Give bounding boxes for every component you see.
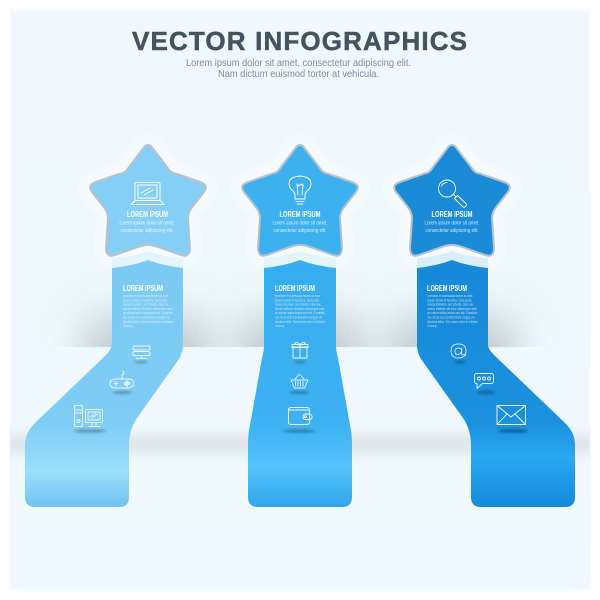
star 2 text [272, 220, 328, 234]
star 1 heading: LOREM IPSUM [127, 209, 168, 219]
ribbon 1 text [123, 283, 174, 328]
ribbon 1 text: faucibus tellus. Sed cursus tortor in ultricies [123, 320, 173, 324]
icon: desktop computer [74, 406, 106, 433]
icon: basket [289, 374, 309, 394]
ribbon 2 text: LOREM IPSUM [275, 283, 315, 293]
ribbon 2 text: dictum eleifend, elit dolor ullamcorper ante, [275, 307, 325, 311]
ribbon 2 text: faucibus tellus. Sed cursus tortor in ultricies [275, 320, 325, 324]
column 2: medium blue [242, 145, 358, 507]
ribbon 3 text: dictum eleifend, elit dolor ullamcorper ante, [428, 307, 478, 311]
star 1 text [120, 220, 174, 234]
subtitle [186, 58, 411, 80]
star 3 text: consectetur adipiscing elit. [426, 228, 478, 234]
ribbon 1 text: LOREM IPSUM [123, 283, 163, 293]
ribbon 2 text: rhoncus. [275, 324, 285, 328]
star 2 text: consectetur adipiscing elit. [274, 228, 326, 234]
chevron under star [417, 251, 488, 268]
icon: wallet [283, 408, 315, 433]
subtitle: Lorem ipsum dolor sit amet, consectetur adipiscing elit. [186, 58, 411, 69]
ribbon 3 text: LOREM IPSUM [427, 283, 467, 293]
star 2 heading: LOREM IPSUM [280, 209, 321, 219]
ribbon 1 text: dictum eleifend, elit dolor ullamcorper ante, [123, 307, 173, 311]
ribbon 3 text: faucibus tellus. Sed cursus tortor in ultricies [428, 320, 478, 324]
icon: server [133, 346, 150, 363]
ribbon 2 text: nec mi ac eros condimentum congue vel [275, 316, 322, 320]
ribbon 1 text: rhoncus. [123, 324, 133, 328]
ribbon 3 text: massa interdum, sed lobortis, risus nec [428, 303, 474, 307]
ribbon 2 text: massa interdum, sed lobortis, risus nec [275, 303, 321, 307]
icon: gift [292, 342, 308, 363]
ribbon 2 [248, 260, 352, 507]
ribbon 3 text [427, 283, 478, 328]
star 3 text [424, 220, 480, 234]
ribbon 3 text: Interdum et malesuada fames ac ante [428, 294, 472, 298]
subtitle: Nam dictum euismod tortor at vehicula. [218, 69, 379, 80]
column 3: dark blue [394, 145, 575, 507]
star 2 text: Lorem ipsum dolor sit amet, [272, 220, 328, 226]
floor shadow band [0, 438, 600, 450]
icon: at sign [451, 344, 466, 363]
icon: game controller [110, 371, 134, 394]
ribbon 1 text: ac rutrum tellus lectus sed elit. Curabitur [123, 311, 174, 315]
icon: laptop [131, 182, 164, 204]
ribbon 3 text: ac rutrum tellus lectus sed elit. Curabitur [428, 311, 478, 315]
star 3 with halo [394, 145, 510, 268]
ribbon 2 text: Interdum et malesuada fames ac ante [275, 294, 320, 298]
title: VECTOR INFOGRAPHICS [132, 26, 467, 56]
ribbon 3 text: rhoncus. [428, 324, 438, 328]
wall shadows [67, 301, 533, 347]
ribbon 1 text: massa interdum, sed lobortis, risus nec [123, 303, 169, 307]
ribbon 3 [417, 260, 575, 507]
star 3 text: Lorem ipsum dolor sit amet, [424, 220, 480, 226]
icon: speech bubble [474, 374, 495, 394]
column 1: light blue [25, 145, 206, 507]
icon: light bulb [289, 176, 311, 204]
ribbon 1 [25, 260, 183, 507]
star 2 with halo [242, 145, 358, 268]
ribbon 1 text: ipsum primis in faucibus. Sed porta [123, 298, 167, 302]
star 1 text: Lorem ipsum dolor sit amet, [120, 220, 174, 226]
ribbon 2 text [275, 283, 326, 328]
ribbon 2 text: ac rutrum tellus lectus sed elit. Curabitur [275, 311, 326, 315]
chevron under star [112, 251, 184, 268]
ribbon 1 text: Interdum et malesuada fames ac ante [123, 294, 168, 298]
star 3 heading: LOREM IPSUM [432, 209, 473, 219]
chevron under star [264, 251, 336, 268]
icon: envelope [497, 406, 528, 433]
ribbon 1 text: nec mi ac eros condimentum congue vel [123, 316, 170, 320]
star 1 text: consectetur adipiscing elit. [120, 228, 174, 234]
ribbon 2 text: ipsum primis in faucibus. Sed porta [275, 298, 319, 302]
star 1 with halo [90, 145, 206, 268]
icon: magnifier [438, 180, 466, 207]
ribbon 3 text: nec mi ac eros condimentum congue vel [428, 316, 475, 320]
ribbon 3 text: ipsum primis in faucibus. Sed porta [428, 298, 472, 302]
